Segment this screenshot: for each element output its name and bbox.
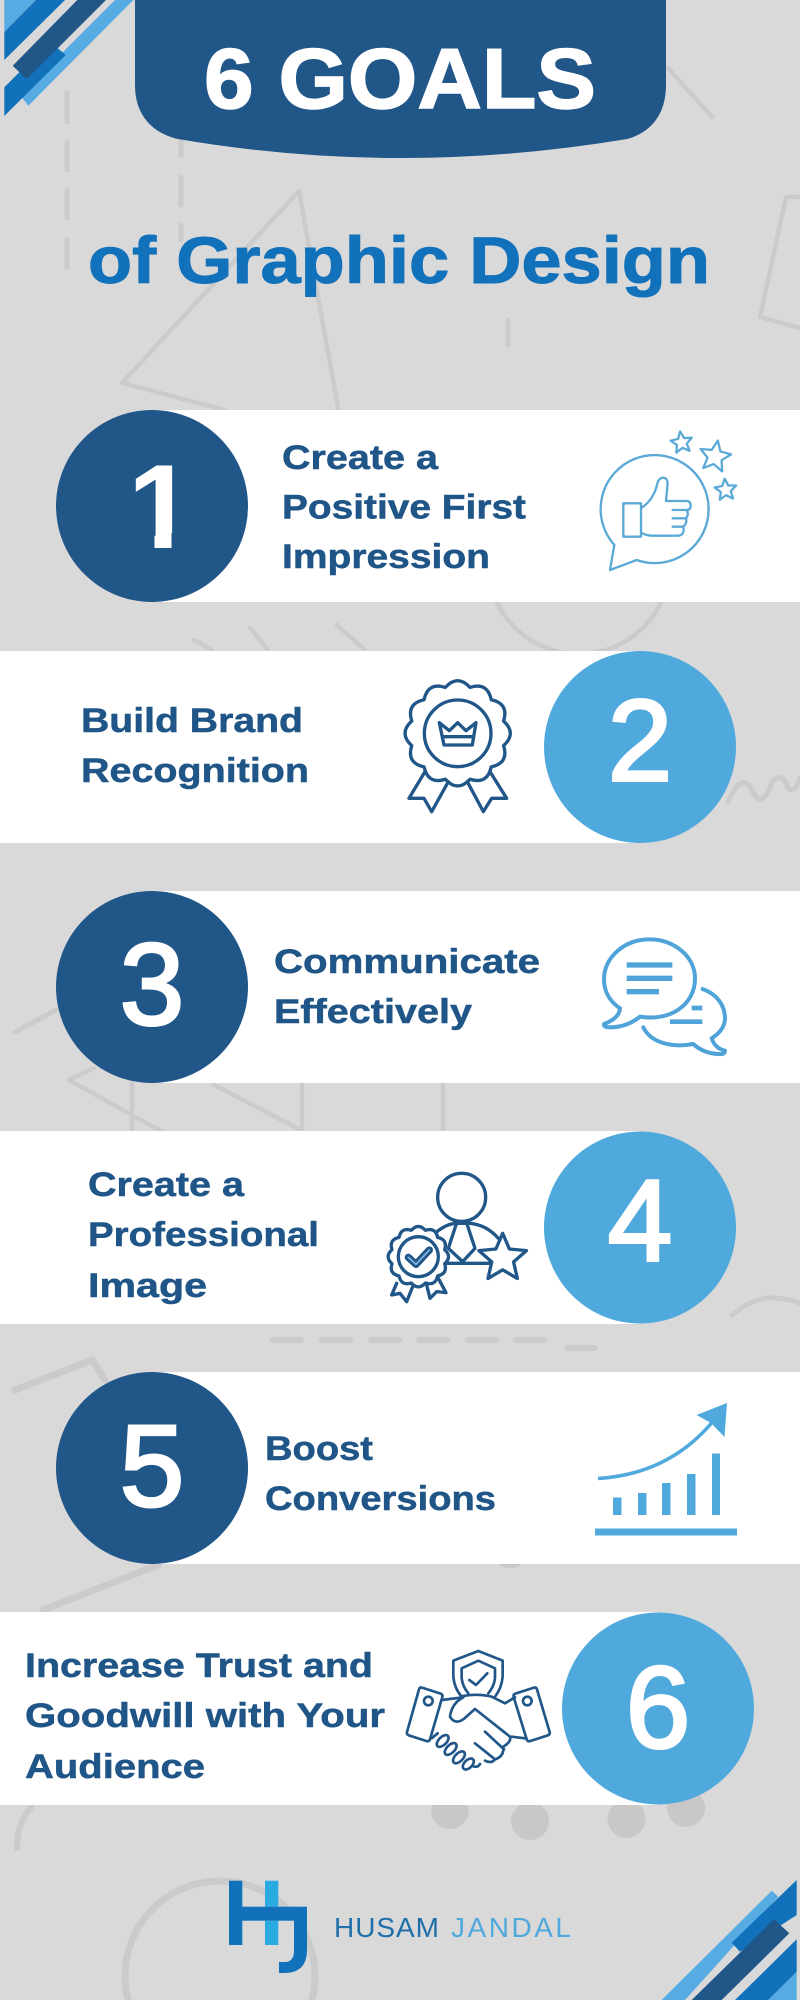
icon: handshake with shield: [407, 1651, 550, 1772]
panel: goal 1: Create a: [282, 439, 439, 477]
panel: goal 6: Audience: [25, 1748, 205, 1786]
panel: goal 6: Goodwill with Your: [25, 1697, 385, 1735]
panel: goal 3: [56, 891, 800, 1083]
panel: goal 4: 4: [608, 1156, 672, 1286]
panel: goal 4: Professional: [88, 1216, 319, 1254]
panel: goal 3: Effectively: [274, 993, 472, 1031]
logo mark: HJ monogram: [229, 1881, 307, 1973]
panel: goal 4: Image: [88, 1267, 207, 1305]
panel: goal 6: [0, 1612, 754, 1805]
panel: goal 4: [0, 1131, 736, 1324]
panel: goal 5: 5: [120, 1401, 184, 1531]
panel: goal 6: 6: [626, 1642, 690, 1772]
panel: goal 5: Boost: [265, 1430, 373, 1468]
icon: growth chart: [595, 1403, 737, 1536]
panel: goal 3: Communicate: [274, 943, 540, 981]
panel: goal 6: Increase Trust and: [25, 1647, 373, 1685]
panel: goal 5: [56, 1372, 800, 1564]
panel: goal 1: Positive First: [282, 488, 526, 526]
logo: Husam Jandal: HUSAM: [334, 1912, 439, 1943]
title banner: 6 GOALS: [135, 0, 666, 158]
panel: goal 2: Build Brand: [81, 702, 303, 740]
title banner: 6 GOALS: 6 GOALS: [204, 32, 596, 127]
panel: goal 3: 3: [120, 920, 184, 1050]
panel: goal 1: [56, 410, 800, 602]
panel: goal 4: Create a: [88, 1166, 245, 1204]
icon: professional with badge and star: [388, 1173, 526, 1302]
icon: award rosette with crown: [405, 681, 510, 812]
panel: goal 1: Impression: [282, 538, 490, 576]
panel: goal 2: Recognition: [81, 752, 309, 790]
panel: goal 5: Conversions: [265, 1480, 496, 1518]
corner decoration bottom-right: [662, 1880, 797, 2000]
icon: chat bubbles: [604, 939, 725, 1054]
panel: goal 2: [0, 651, 736, 843]
panel: goal 2: 2: [608, 676, 672, 806]
logo: Husam Jandal: JANDAL: [451, 1912, 571, 1943]
corner decoration top-left: [4, 0, 133, 116]
panel: goal 1: 1: [128, 440, 194, 574]
icon: thumbs up speech bubble: [601, 430, 737, 570]
subtitle: of Graphic Design: [88, 223, 710, 297]
logo: Husam Jandal: [229, 1881, 571, 1973]
